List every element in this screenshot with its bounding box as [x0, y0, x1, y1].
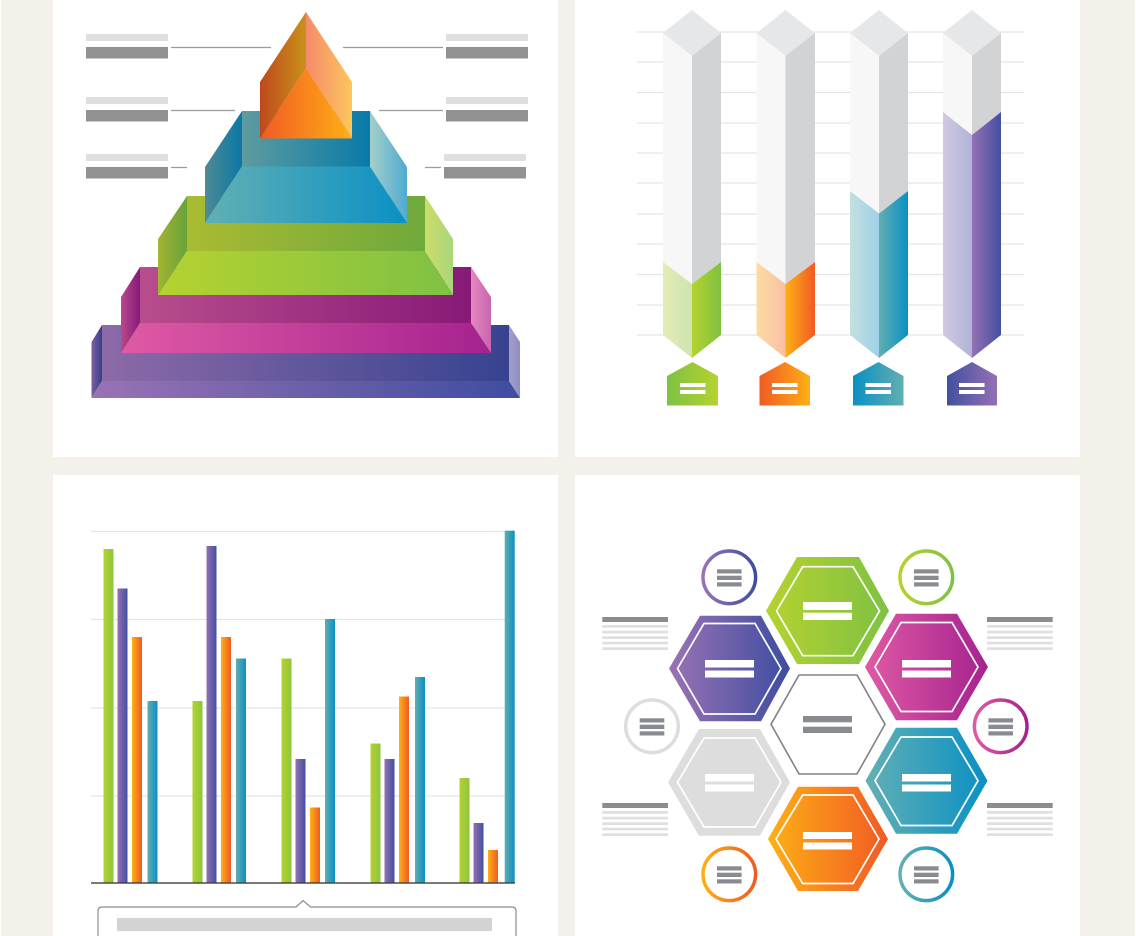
text block: lower left — [602, 803, 668, 836]
hexagon: green — [766, 557, 889, 664]
panel: pyramid — [53, 0, 558, 457]
badge: magenta circle — [974, 700, 1027, 753]
callout text bar — [117, 918, 492, 931]
pyramid tier: purple base — [92, 325, 520, 398]
bar chart grid lines — [91, 532, 515, 796]
column tag: green — [667, 362, 718, 406]
callout box — [98, 900, 516, 936]
pyramid labels, right — [444, 34, 528, 178]
pyramid leader lines — [171, 48, 443, 168]
badge: grey circle — [626, 700, 678, 753]
bar group 2 — [192, 546, 246, 883]
hexagon: magenta — [865, 614, 988, 720]
column 4: purple — [943, 10, 1001, 358]
column tag: purple — [947, 362, 997, 406]
column 1: green — [663, 10, 721, 358]
hexagon: grey — [668, 729, 790, 836]
column chart grid lines — [637, 32, 1024, 335]
column 3: teal — [850, 10, 908, 358]
hexagon: teal — [866, 728, 988, 834]
pyramid tier: orange top — [260, 12, 352, 138]
hexagon: purple — [669, 616, 790, 721]
pyramid tier: green — [158, 196, 453, 295]
pyramid tier: teal — [205, 111, 407, 223]
column tag: orange — [760, 362, 810, 406]
bar chart baseline — [91, 882, 515, 884]
text block: upper left — [602, 617, 668, 650]
hexagon: centre outline — [771, 675, 885, 774]
pyramid tier: magenta — [121, 267, 491, 353]
bar group 4 — [370, 677, 425, 883]
panel: hexagon cycle — [575, 475, 1080, 936]
column 2: orange — [756, 10, 815, 358]
badge: orange circle — [703, 848, 756, 901]
text block: lower right — [987, 803, 1053, 836]
hexagon: orange — [768, 787, 888, 891]
panel: isometric column chart — [575, 0, 1080, 457]
badge: purple circle — [703, 551, 756, 604]
pyramid labels, left — [86, 34, 168, 178]
panel: grouped bar chart — [53, 475, 558, 936]
text block: upper right — [987, 617, 1053, 650]
bar group 5 — [460, 531, 515, 883]
badge: green circle — [900, 551, 953, 604]
bar group 3 — [282, 619, 335, 883]
column tag: teal — [853, 362, 904, 406]
badge: teal circle — [900, 848, 953, 901]
bar group 1 — [104, 549, 158, 883]
